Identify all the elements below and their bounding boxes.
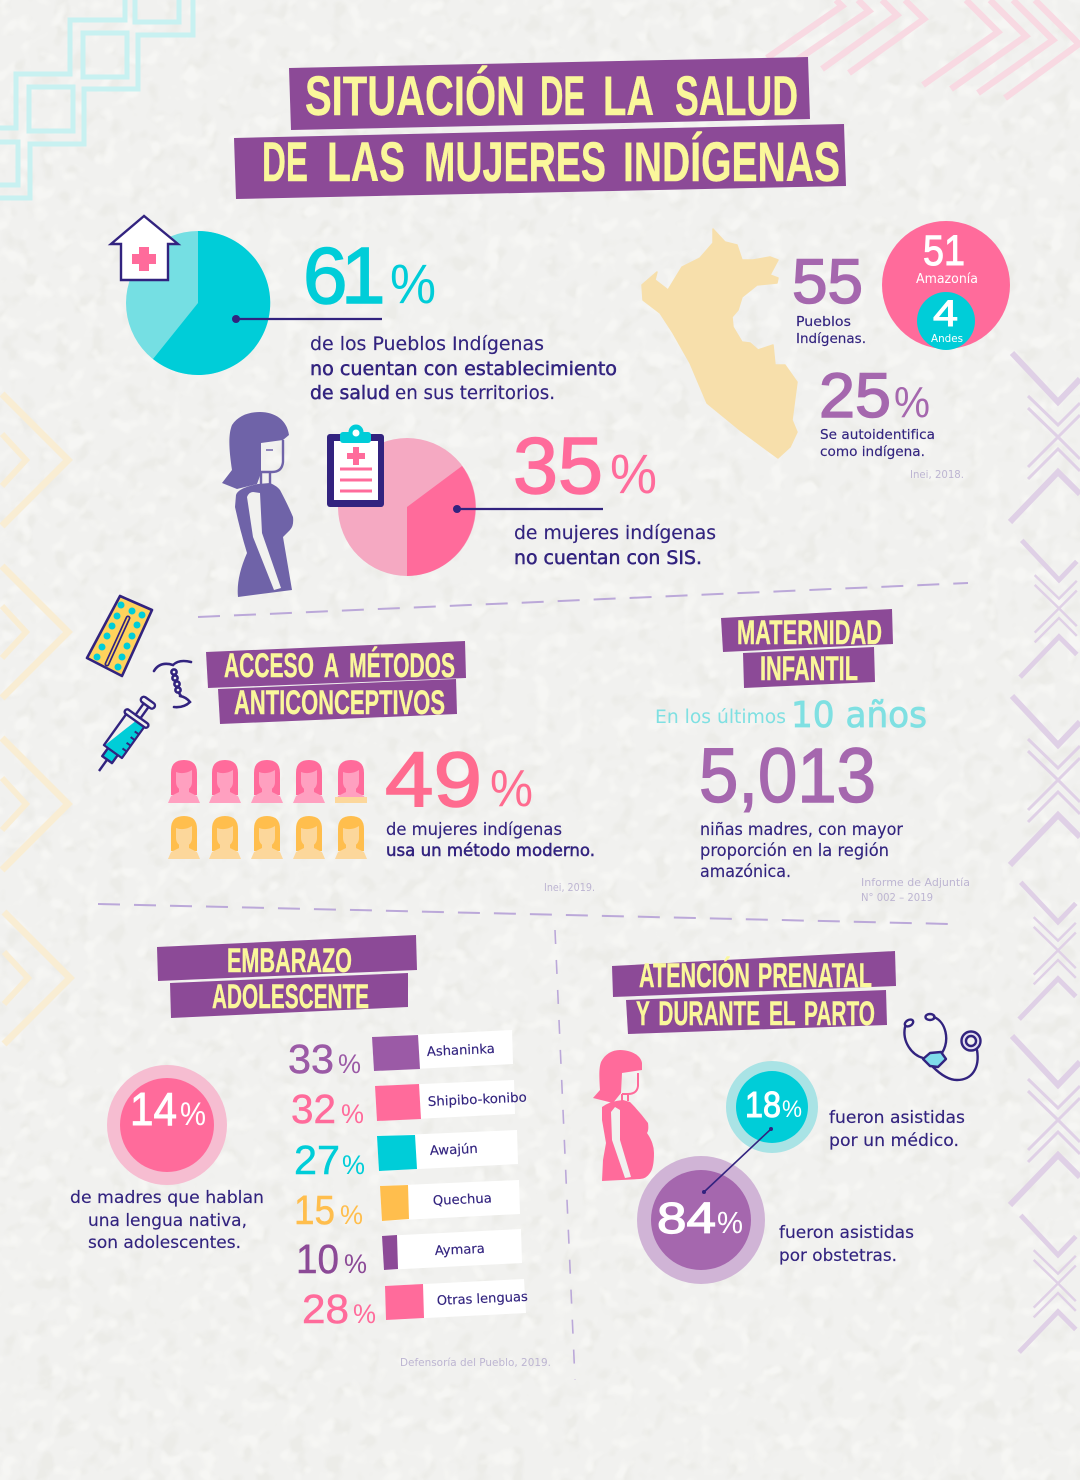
decorative purple zigzags: [1010, 353, 1080, 1352]
text: 61% description: no cuentan con establecimiento: [310, 358, 617, 380]
source: Inei 2018: Inei, 2018.: [910, 468, 964, 481]
circle: 18% médico: %: [782, 1096, 802, 1123]
stat: 49%: 49: [385, 735, 482, 823]
divider: [98, 904, 950, 924]
bar row: Awajún 27%: [294, 1130, 518, 1183]
stat: 55 pueblos indígenas: 55: [792, 247, 863, 317]
bar row: Shipibo-konibo 32%: 32: [291, 1086, 336, 1132]
connector between circles: [702, 1127, 773, 1194]
heading: maternidad infantil: MATERNIDAD: [737, 614, 882, 652]
circle: 84% obstetras: %: [717, 1205, 743, 1240]
heading: maternidad infantil: INFANTIL: [760, 650, 858, 688]
bar row: Awajún 27%: %: [342, 1150, 365, 1180]
circle: 84% obstetras: 84: [657, 1194, 716, 1243]
bar row: Quechua 15%: Quechua: [433, 1191, 492, 1209]
circle: 51 Amazonía: [882, 221, 1010, 349]
divider: [198, 583, 968, 617]
pie chart: 35%: [338, 438, 603, 576]
circle: 14%: 14: [130, 1083, 177, 1135]
circle: 4 Andes: 4: [933, 293, 958, 334]
stat: 61%: 6: [303, 231, 348, 320]
circle: 14%: %: [180, 1096, 206, 1132]
bar row: Otras lenguas 28%: 28: [302, 1286, 349, 1332]
heading: acceso a métodos anticonceptivos: ACCESO A MÉTODOS: [224, 647, 455, 685]
bar row: Aymara 10%: [296, 1229, 522, 1282]
text: 61% description: de salud: [310, 382, 390, 404]
source: informe de adjuntía: Informe de Adjuntía: [861, 876, 970, 889]
text: 35% description: [514, 522, 716, 569]
decorative yellow chevrons: [2, 394, 70, 1044]
text: niñas madres: niñas madres, con mayor: [700, 820, 903, 840]
text: 61% description: en sus territorios.: [395, 382, 555, 404]
circle: 14%: [107, 1065, 227, 1185]
title: INDÍGENAS: [623, 130, 840, 193]
text: madres adolescentes: [70, 1188, 264, 1253]
text: por obstetras: fueron asistidas: [779, 1223, 914, 1243]
stat: 35%: [513, 421, 657, 510]
heading: acceso a métodos anticonceptivos: [206, 641, 466, 724]
source: informe de adjuntía: [861, 876, 970, 904]
text: niñas madres: proporción en la región: [700, 841, 889, 861]
text: 35% description: de mujeres indígenas: [514, 522, 716, 544]
text: por un médico: fueron asistidas: [829, 1108, 965, 1128]
heading: atención prenatal y durante el parto: ATENCIÓN PRENATAL: [639, 957, 872, 995]
bar row: Otras lenguas 28%: Otras lenguas: [437, 1290, 528, 1309]
stat: 35%: %: [610, 442, 657, 505]
stat: 25%: [819, 361, 935, 460]
text: 49% description: de mujeres indígenas: [386, 820, 562, 840]
text: 61% description: de los Pueblos Indígenas: [310, 333, 544, 355]
title: LA: [603, 64, 654, 127]
text: por obstetras: por obstetras.: [779, 1246, 897, 1266]
bar row: Shipibo-konibo 32%: [291, 1080, 527, 1132]
source: Inei 2019: Inei, 2019.: [544, 881, 595, 894]
bar row: Awajún 27%: 27: [294, 1137, 340, 1183]
text: 61% description: [310, 333, 617, 404]
pictogram: women 49%: [168, 760, 367, 859]
circle: 51 Amazonía: Amazonía: [916, 272, 978, 287]
bar row: Aymara 10%: %: [344, 1249, 367, 1279]
text: 49% description: usa un método moderno.: [386, 841, 595, 861]
stat: 35%: 35: [513, 421, 603, 510]
stat: 55 pueblos indígenas: Indígenas.: [796, 331, 866, 347]
title: DE: [262, 130, 308, 193]
heading: embarazo adolescente: [157, 935, 417, 1018]
text: por un médico: por un médico.: [829, 1131, 959, 1151]
bar row: Otras lenguas 28%: %: [353, 1299, 376, 1329]
title: [234, 57, 846, 199]
title: LAS: [327, 130, 405, 193]
text: en los últimos 10 años: 10 años: [791, 695, 927, 736]
decorative cyan stepped pattern: [0, 0, 193, 198]
title: SALUD: [675, 64, 798, 127]
text: 49% description: [386, 820, 595, 861]
circle: 18% médico: 18: [745, 1084, 781, 1125]
source: informe de adjuntía: N° 002 – 2019: [861, 891, 933, 904]
text: en los últimos 10 años: [655, 695, 927, 736]
text: niñas madres: [700, 820, 903, 882]
circle: 18% médico: [726, 1061, 818, 1153]
decorative pink chevrons: [767, 0, 1079, 98]
divider: [555, 930, 575, 1380]
icon: syringe: [88, 692, 161, 779]
stat: 61%: 1: [341, 231, 386, 320]
bar row: Aymara 10%: 10: [296, 1236, 339, 1282]
source: Defensoría del Pueblo: Defensoría del Pueblo, 2019.: [400, 1356, 551, 1369]
text: niñas madres: amazónica.: [700, 862, 791, 882]
bar row: Quechua 15%: %: [340, 1200, 363, 1230]
stat: 25%: como indígena.: [820, 444, 925, 460]
heading: atención prenatal y durante el parto: [612, 951, 896, 1034]
text: madres adolescentes: de madres que hablan: [70, 1188, 264, 1208]
stat: 61%: %: [390, 252, 436, 315]
bar row: Ashaninka 33%: [288, 1030, 513, 1082]
bar row: Quechua 15%: 15: [294, 1187, 335, 1233]
pie chart: 61%: [126, 231, 382, 375]
stat: 61%: [303, 231, 436, 320]
bar row: Ashaninka 33%: 33: [288, 1036, 334, 1082]
heading: embarazo adolescente: EMBARAZO: [227, 942, 352, 980]
icon: stethoscope: [904, 1014, 980, 1080]
bar row: Quechua 15%: [294, 1180, 520, 1233]
text: en los últimos 10 años: En los últimos: [655, 707, 786, 728]
text: madres adolescentes: son adolescentes.: [88, 1233, 241, 1253]
heading: embarazo adolescente: ADOLESCENTE: [212, 978, 369, 1016]
stat: 25%: Se autoidentifica: [820, 427, 935, 443]
circle: 4 Andes: Andes: [931, 332, 963, 345]
stat: 55 pueblos indígenas: Pueblos: [796, 314, 851, 330]
bar row: Awajún 27%: Awajún: [430, 1142, 478, 1159]
text: madres adolescentes: una lengua nativa,: [88, 1211, 247, 1231]
map of Peru: [642, 229, 797, 458]
title: DE: [540, 64, 585, 127]
stat: 49%: [385, 735, 533, 823]
bar row: Shipibo-konibo 32%: %: [341, 1099, 364, 1129]
circle: 4 Andes: [917, 292, 975, 350]
icon: pregnant woman: [593, 1050, 654, 1181]
icon: health post house: [111, 216, 178, 280]
title: MUJERES: [424, 130, 606, 193]
bar row: Otras lenguas 28%: [302, 1279, 528, 1332]
bar row: Aymara 10%: Aymara: [435, 1242, 485, 1259]
heading: atención prenatal y durante el parto: Y DURANTE EL PARTO: [636, 995, 875, 1033]
text: por un médico: [829, 1108, 965, 1151]
text: por obstetras: [779, 1223, 914, 1266]
text: 35% description: no cuentan con SIS.: [514, 547, 702, 569]
bar row: Ashaninka 33%: %: [338, 1049, 361, 1079]
stat: 25%: %: [894, 378, 930, 427]
stat: 25%: 25: [819, 361, 891, 431]
circle: 51 Amazonía: 51: [923, 227, 965, 275]
bar row: Shipibo-konibo 32%: Shipibo-konibo: [428, 1091, 527, 1110]
circle: 84% obstetras: [637, 1156, 765, 1284]
icon: clipboard: [327, 424, 384, 507]
title: SITUACIÓN: [305, 64, 525, 127]
bar row: Ashaninka 33%: Ashaninka: [427, 1042, 495, 1060]
stat: 55 pueblos indígenas: [792, 247, 866, 347]
icon: woman silhouette: [222, 412, 293, 597]
stat: 49%: %: [490, 760, 533, 818]
heading: acceso a métodos anticonceptivos: ANTICONCEPTIVOS: [234, 684, 445, 722]
heading: maternidad infantil: [721, 609, 893, 688]
icon: IUD: [154, 661, 191, 707]
icon: pill pack: [87, 596, 152, 676]
stat: 5,013: 5,013: [699, 733, 876, 819]
